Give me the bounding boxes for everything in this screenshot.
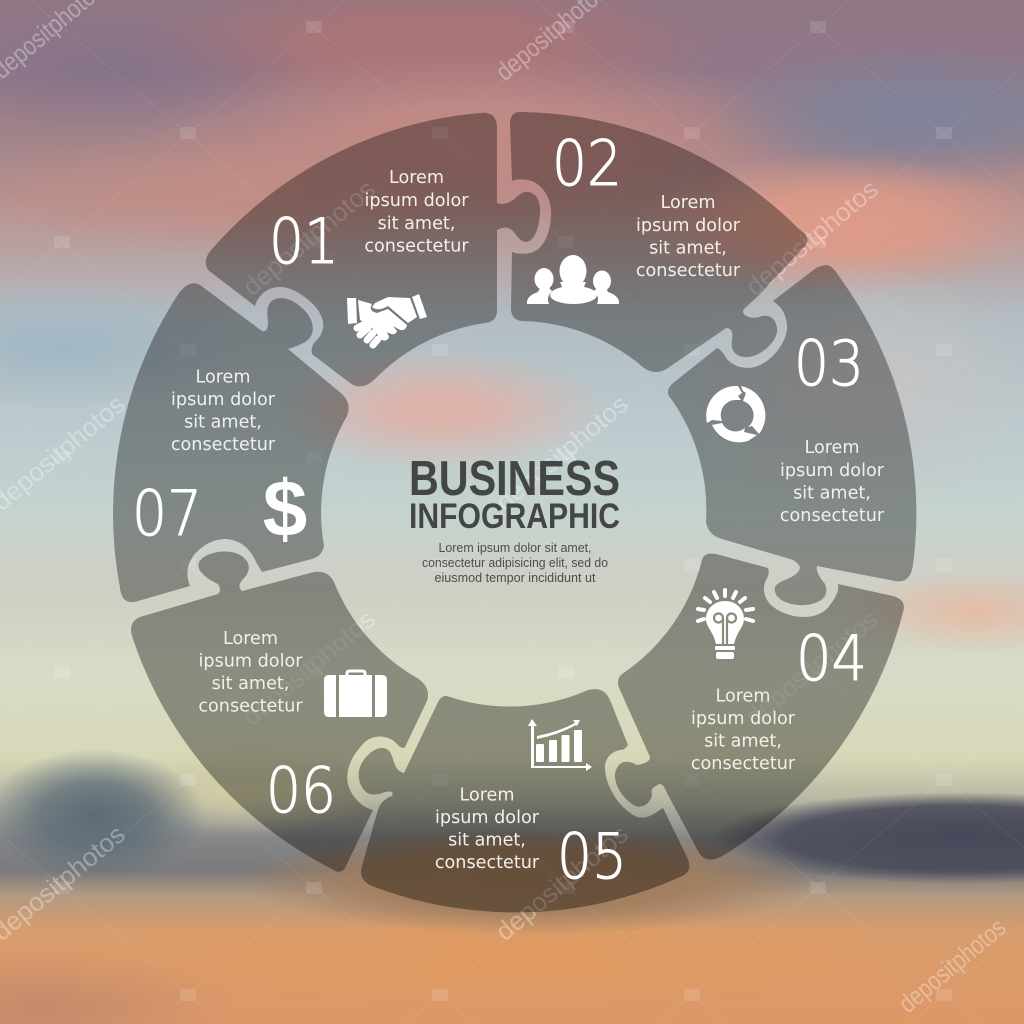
number 06: 06: [266, 754, 336, 827]
number 03: 03: [794, 327, 864, 400]
text block 03: ipsum dolor: [780, 461, 885, 481]
panel: segment 03: [668, 265, 916, 605]
text block 05: consectetur: [435, 853, 540, 873]
icon: light bulb: [698, 590, 753, 659]
text block 01: consectetur: [364, 236, 469, 256]
text block 07: sit amet,: [184, 412, 262, 432]
icon: briefcase: [324, 671, 387, 717]
description text: [422, 541, 608, 585]
text block 06: sit amet,: [212, 674, 289, 694]
text block 07: consectetur: [171, 435, 276, 455]
text block 02: sit amet,: [649, 238, 727, 258]
text block 01: sit amet,: [378, 214, 455, 234]
text block 07: ipsum dolor: [171, 390, 276, 410]
text block 06: Lorem: [223, 629, 278, 649]
number 05: 05: [557, 820, 627, 893]
title line 2: INFOGRAPHIC: [409, 497, 620, 536]
text block 06: consectetur: [198, 696, 303, 716]
icon: bar chart: [528, 719, 592, 771]
text block 05: sit amet,: [448, 830, 526, 850]
text block 01: ipsum dolor: [365, 191, 469, 211]
text block 02: consectetur: [636, 261, 741, 281]
text block 03: sit amet,: [793, 484, 871, 504]
text block 02: Lorem: [660, 193, 716, 213]
watermarks: depositphotos: [490, 389, 634, 517]
watermarks: depositphotos: [237, 174, 381, 302]
text block 04: Lorem: [715, 686, 771, 706]
text block 03: Lorem: [804, 438, 860, 458]
text block 03: consectetur: [780, 506, 885, 526]
text block 06: ipsum dolor: [199, 652, 303, 672]
panel: segment 02: [510, 112, 808, 372]
text block 07: Lorem: [195, 368, 251, 388]
description text: eiusmod tempor incididunt ut: [434, 571, 596, 585]
watermarks: depositphotos: [237, 604, 381, 732]
icon: dollar sign: $: [263, 464, 307, 553]
watermarks: depositphotos: [740, 604, 884, 732]
number 04: 04: [796, 622, 867, 695]
panel: segment 07: [113, 283, 349, 602]
text block 02: ipsum dolor: [636, 216, 741, 236]
description text: consectetur adipisicing elit, sed do: [422, 556, 608, 570]
icon: people: [527, 255, 619, 304]
panel: segment 04: [615, 554, 904, 860]
watermarks: depositphotos: [740, 174, 884, 302]
watermarks: depositphotos: [490, 819, 634, 947]
description text: Lorem ipsum dolor sit amet,: [438, 541, 592, 555]
icon: cycle arrows: [706, 386, 765, 442]
text block 01: Lorem: [389, 168, 444, 188]
text block 04: sit amet,: [704, 732, 782, 752]
text block 04: consectetur: [691, 754, 796, 774]
number 07: 07: [132, 477, 202, 550]
text block 05: ipsum dolor: [435, 808, 540, 828]
center title block: [409, 452, 620, 585]
title line 1: BUSINESS: [409, 452, 620, 506]
text block 04: ipsum dolor: [691, 709, 796, 729]
text block 05: Lorem: [459, 786, 515, 806]
number 01: 01: [269, 205, 339, 278]
panel: segment 01: [206, 113, 540, 387]
panel: segment 05: [359, 689, 689, 912]
panel: segment 06: [131, 551, 428, 872]
icon: handshake: [347, 294, 427, 345]
number 02: 02: [552, 127, 622, 200]
